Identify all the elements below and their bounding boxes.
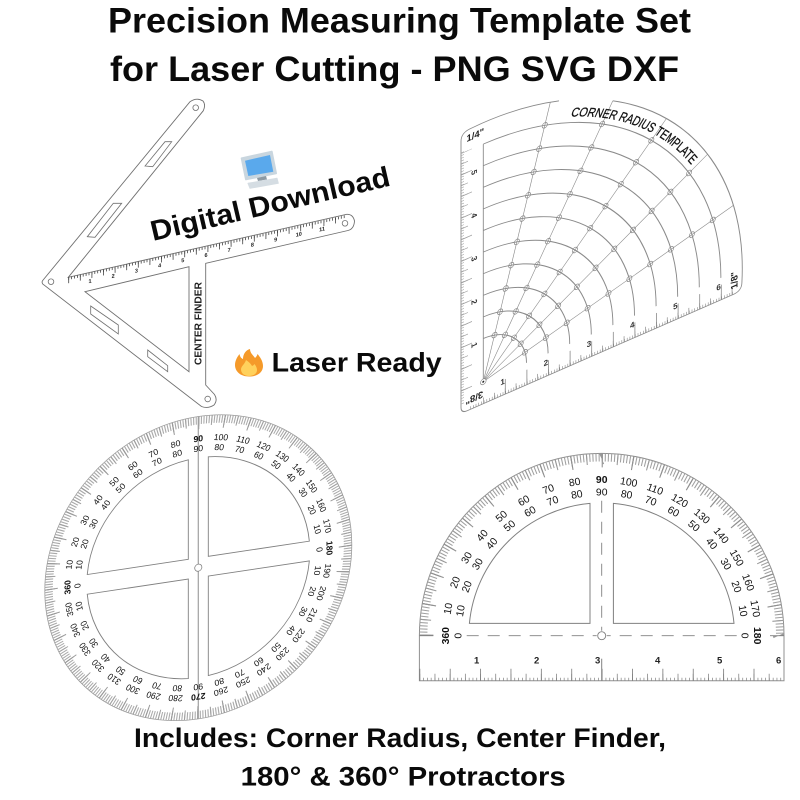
inner degree numbers: 60 (252, 449, 266, 462)
outer degree numbers: 60 (126, 459, 140, 473)
inner degree numbers: 40 (485, 536, 501, 552)
inner degree numbers: 70 (643, 495, 658, 509)
outer degree numbers: 10 (443, 602, 456, 615)
ruler ticks and numbers: 6 (204, 253, 208, 259)
outer degree numbers: 210 (304, 607, 320, 624)
inner degree numbers: 50 (502, 518, 518, 534)
title (108, 1, 691, 89)
outer degree numbers: 40 (475, 528, 491, 544)
outer degree numbers: 170 (321, 518, 334, 535)
dashed center lines (467, 501, 737, 636)
bottom inch numbers: 3 (587, 338, 592, 350)
icon: fire (235, 349, 263, 376)
rectangular slots (87, 142, 172, 372)
outer degree numbers: 300 (124, 682, 142, 697)
inner degree numbers: 10 (455, 604, 468, 618)
quadrant cutouts (87, 442, 309, 694)
inner degree numbers: 10 (73, 560, 85, 570)
outer degree numbers: 140 (711, 526, 730, 546)
ruler ticks and numbers (68, 216, 346, 290)
outer degree numbers: 80 (170, 438, 181, 450)
inner degree numbers: 90 (193, 443, 203, 454)
footer caption (134, 723, 666, 792)
inner degree numbers: 60 (131, 467, 145, 480)
inner degree numbers: 70 (151, 455, 163, 469)
inner degree numbers: 80 (172, 447, 183, 460)
inner degree numbers: 20 (78, 619, 91, 632)
outer degree numbers: 80 (568, 477, 582, 489)
outer degree numbers: 30 (78, 514, 92, 527)
inner degree numbers: 80 (214, 676, 225, 688)
ruler inch numbers: 3 (595, 656, 600, 667)
outer degree numbers: 150 (304, 477, 320, 495)
title: Precision Measuring Template Set (108, 1, 691, 41)
ruler inch numbers: 5 (717, 656, 723, 667)
panel: center finder template (42, 99, 354, 407)
panel: corner radius template (460, 100, 743, 412)
inner degree numbers: 20 (306, 586, 318, 597)
outer degree numbers: 50 (107, 474, 121, 488)
outer degree numbers: 110 (235, 433, 251, 446)
inner degree numbers: 30 (87, 517, 100, 530)
left inch numbers: 4 (469, 211, 479, 220)
outer degree numbers: 360 (441, 627, 452, 644)
inner degree numbers: 40 (284, 624, 298, 637)
outer degree numbers: 180 (324, 540, 334, 556)
center point (598, 632, 606, 640)
corner size labels (465, 15, 740, 406)
inner degree numbers: 20 (461, 579, 475, 594)
ruler inch numbers: 4 (655, 656, 661, 667)
outer degree numbers: 180 (751, 627, 762, 645)
inner degree numbers: 50 (269, 458, 283, 472)
laser ready label: Laser Ready (272, 348, 442, 378)
outer degree numbers: 160 (739, 573, 756, 593)
outer degree numbers: 170 (747, 599, 761, 618)
panel: 360 degree protractor (45, 393, 352, 742)
outer degree numbers: 90 (596, 475, 608, 486)
quadrant cutouts (469, 503, 734, 623)
inner degree numbers: 20 (728, 580, 743, 594)
inner degree numbers: 10 (736, 604, 748, 618)
vertical axis and radius arcs (483, 40, 721, 382)
inner degree numbers: 30 (296, 486, 310, 499)
outer degree numbers: 100 (213, 432, 229, 442)
inner degree numbers: 40 (99, 498, 113, 512)
outer degree numbers: 120 (255, 439, 273, 453)
ruler ticks and numbers: 10 (296, 232, 302, 239)
outer degree numbers: 240 (255, 661, 273, 678)
inner degree numbers (72, 425, 324, 711)
ruler ticks and numbers: 4 (158, 263, 162, 270)
outer degree numbers: 310 (105, 671, 123, 687)
bottom ruler ticks (470, 287, 733, 408)
inner degree numbers: 20 (78, 538, 91, 550)
inner degree numbers: 80 (620, 489, 633, 502)
outer degree numbers: 280 (167, 693, 184, 703)
bottom inch numbers (500, 281, 721, 387)
bottom inch numbers: 2 (544, 357, 548, 368)
inner degree numbers: 50 (113, 664, 127, 677)
digital download label: Digital Download (147, 161, 393, 248)
panel: 180 degree protractor (419, 453, 784, 681)
corner size labels: 1/4" (466, 127, 484, 145)
outer degree numbers: 90 (193, 433, 203, 444)
outer degree numbers: 20 (449, 575, 463, 590)
outer degree numbers: 30 (460, 550, 475, 566)
corner size labels: 3/8" (465, 388, 483, 406)
outer degree numbers: 40 (91, 493, 105, 507)
outer degree numbers: 230 (274, 645, 291, 663)
ruler ticks (419, 659, 784, 681)
outer degree numbers: 130 (274, 448, 291, 464)
template title: CORNER RADIUS TEMPLATE (572, 107, 698, 165)
outer circle (45, 393, 352, 742)
outer degree numbers: 190 (321, 563, 334, 578)
left inch numbers: 3 (469, 254, 479, 263)
inner degree numbers: 40 (703, 536, 719, 552)
inner degree numbers: 70 (233, 667, 246, 680)
inner degree numbers: 0 (454, 633, 465, 639)
inner degree numbers: 0 (739, 633, 750, 639)
vertical center line (197, 417, 199, 718)
triangular cutout (85, 267, 189, 372)
outer degree numbers: 120 (669, 492, 690, 511)
outer degree numbers: 350 (63, 601, 75, 618)
ruler ticks and numbers: 7 (228, 247, 231, 254)
outer degree numbers: 70 (147, 446, 160, 460)
inner degree numbers: 10 (73, 600, 85, 612)
inner degree numbers: 30 (87, 636, 100, 650)
inner degree numbers: 80 (171, 683, 183, 693)
inner degree numbers: 30 (717, 557, 733, 572)
outer degree numbers: 10 (64, 560, 75, 570)
outer degree numbers: 130 (691, 507, 712, 527)
ruler inch numbers (474, 656, 781, 667)
degree ticks (419, 457, 784, 636)
ruler ticks and numbers: 1 (88, 279, 92, 285)
inner degree numbers: 10 (312, 566, 323, 576)
degree ticks (49, 398, 348, 737)
bottom inch numbers: 6 (716, 281, 721, 293)
center finder label: CENTER FINDER (194, 281, 204, 365)
outer degree numbers: 260 (213, 684, 229, 698)
ruler inch numbers: 2 (534, 656, 539, 667)
inner degree numbers: 20 (306, 503, 318, 517)
origin point (480, 378, 486, 386)
ruler inch numbers: 6 (776, 656, 781, 667)
inner degree numbers: 80 (214, 442, 225, 452)
bottom inch numbers: 5 (673, 300, 678, 312)
inner degree numbers: 60 (523, 505, 538, 520)
left inch numbers: 2 (469, 297, 479, 306)
outer degree numbers (62, 413, 334, 722)
inner degree numbers: 0 (72, 583, 82, 589)
outer degree numbers: 100 (619, 476, 638, 490)
outer degree numbers: 250 (234, 674, 252, 690)
outer degree numbers: 110 (645, 482, 665, 498)
inner degree numbers: 30 (296, 605, 310, 618)
outer degree numbers: 220 (290, 627, 307, 645)
inner degree numbers: 40 (99, 651, 113, 665)
icon: desktop computer (242, 152, 278, 188)
template outline (461, 10, 742, 413)
inner degree numbers: 50 (685, 519, 701, 535)
outer degree numbers: 320 (89, 657, 106, 674)
inner degree numbers: 90 (596, 488, 608, 499)
left inch numbers: 1 (469, 341, 479, 350)
inner degree numbers: 70 (150, 680, 163, 692)
outer degree numbers: 150 (727, 548, 745, 569)
outer degree numbers: 270 (191, 691, 206, 703)
ruler ticks and numbers: 3 (135, 268, 138, 275)
inner degree numbers: 30 (471, 557, 486, 572)
radial lines with nodes (481, 21, 734, 385)
outer degree numbers: 200 (314, 585, 329, 602)
footer caption: 180° & 360° Protractors (241, 762, 566, 792)
outer degree numbers: 340 (68, 621, 82, 639)
outer degree numbers: 160 (314, 496, 329, 514)
ruler ticks and numbers: 9 (274, 237, 277, 244)
inner degree numbers: 60 (252, 655, 265, 669)
outer degree numbers: 290 (145, 689, 162, 702)
inner degree numbers: 60 (665, 505, 681, 520)
ruler inch numbers: 1 (474, 656, 480, 667)
left ruler ticks (462, 149, 466, 404)
outer degree numbers: 70 (541, 483, 556, 497)
inner degree numbers: 50 (269, 640, 283, 654)
corner size labels: 1/8" (730, 268, 740, 291)
outer degree numbers: 360 (62, 579, 72, 595)
corner holes (48, 105, 348, 402)
bottom inch numbers: 1 (500, 376, 505, 387)
ruler ticks and numbers: 8 (251, 242, 254, 249)
inner degree numbers: 70 (546, 495, 560, 509)
left inch numbers: 5 (469, 168, 479, 177)
outer degree numbers: 330 (77, 640, 93, 658)
inner degree numbers: 80 (570, 489, 584, 502)
inner degree numbers: 70 (233, 444, 246, 455)
left inch numbers (469, 168, 479, 350)
title: for Laser Cutting - PNG SVG DXF (110, 49, 679, 89)
footer caption: Includes: Corner Radius, Center Finder, (134, 723, 666, 753)
inner degree numbers: 50 (114, 481, 128, 495)
ruler ticks and numbers: 11 (319, 226, 325, 234)
inner degree numbers: 60 (131, 674, 144, 686)
bottom inch numbers: 4 (630, 319, 635, 331)
outer degree numbers: 60 (516, 494, 532, 509)
inner degree numbers: 90 (193, 681, 203, 693)
center point (195, 564, 202, 572)
inner degree numbers (454, 488, 750, 639)
outer degree numbers: 20 (69, 536, 82, 548)
outer degree numbers (441, 475, 762, 645)
inner degree numbers: 0 (314, 546, 324, 553)
outer degree numbers: 50 (494, 509, 510, 525)
ruler ticks and numbers: 2 (112, 273, 115, 280)
protractor outline (419, 453, 784, 681)
outer degree numbers: 140 (290, 461, 307, 478)
inner degree numbers: 40 (284, 470, 298, 484)
center finder outline (42, 99, 354, 407)
inner degree numbers: 10 (312, 523, 323, 535)
ruler ticks and numbers: 5 (181, 258, 184, 264)
